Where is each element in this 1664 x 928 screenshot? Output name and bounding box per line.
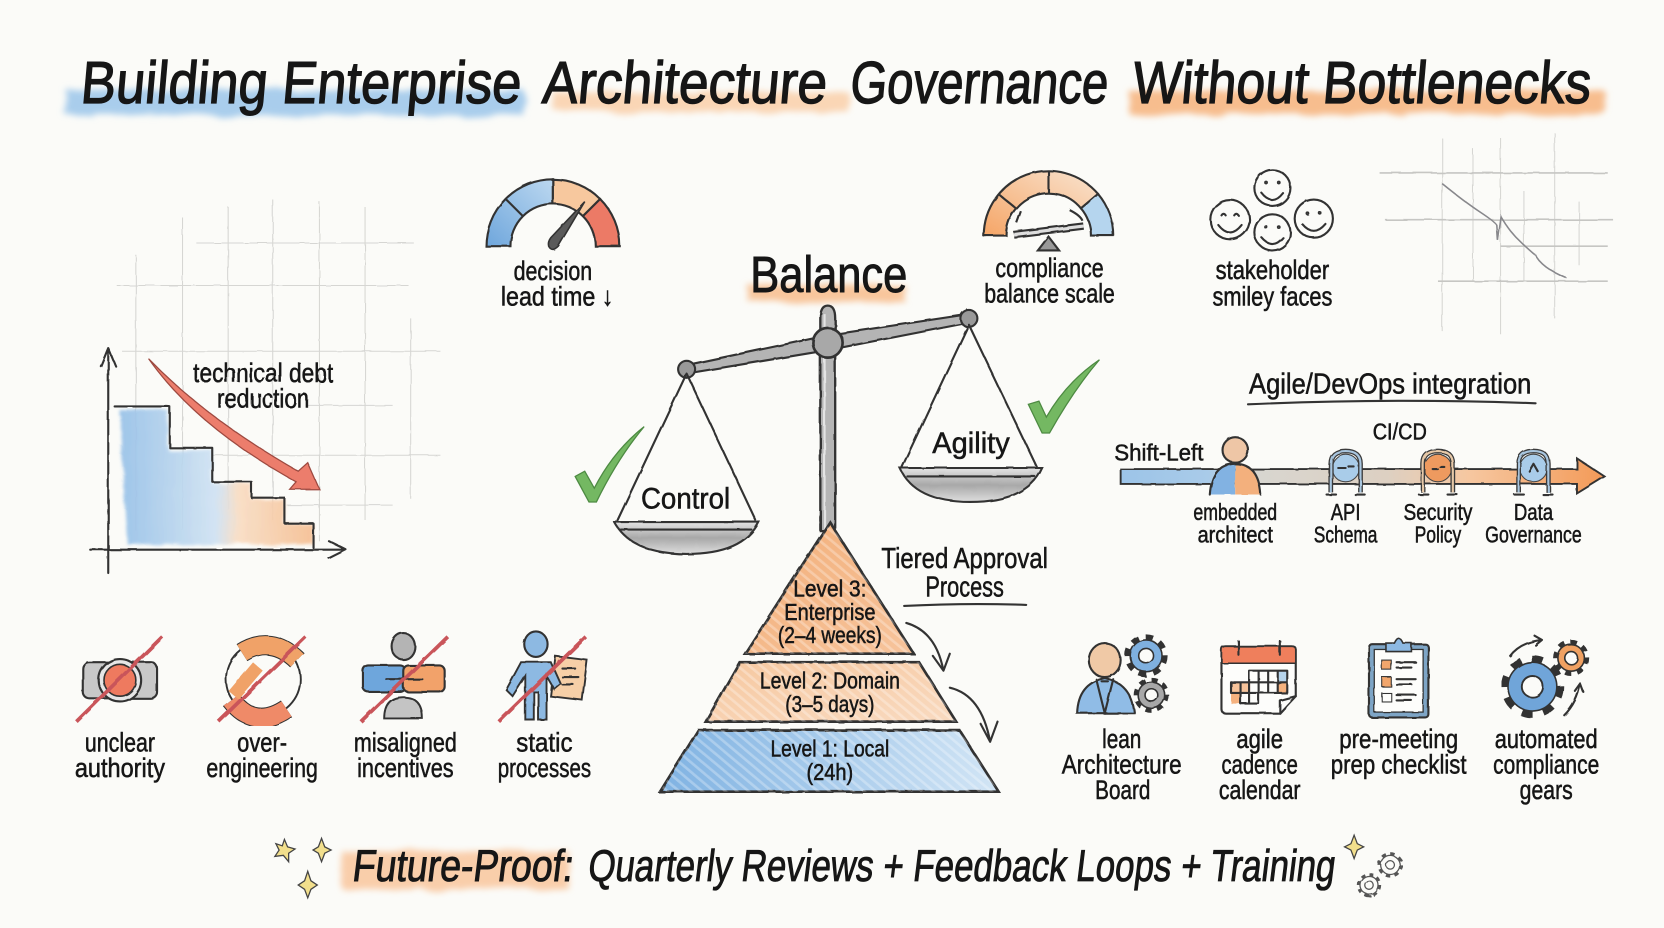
title <box>66 49 1605 116</box>
pyramid: tiered approval <box>660 522 1048 792</box>
anti-pattern labels: misaligned <box>354 727 457 757</box>
level 2 text: Level 2: Domain <box>760 668 900 694</box>
footer text <box>350 842 1339 891</box>
practice labels: calendar <box>1219 775 1301 805</box>
practice labels: pre-meeting <box>1339 724 1458 754</box>
pipeline stage labels: Security <box>1403 499 1473 525</box>
pipeline stage labels: Data <box>1514 499 1553 525</box>
left pan label: Control <box>641 482 730 515</box>
chart label: reduction <box>217 384 309 414</box>
compliance dial <box>984 171 1113 250</box>
panel: governance practices row <box>1062 636 1599 805</box>
icon: unclear authority <box>76 637 162 722</box>
title text: Architecture <box>540 49 830 116</box>
smiley label: smiley faces <box>1212 282 1332 312</box>
panel: anti-patterns row <box>75 631 591 783</box>
pipeline stage labels: embedded <box>1193 499 1277 525</box>
pipeline heading: Agile/DevOps integration <box>1249 369 1531 401</box>
chart: technical debt staircase <box>90 348 346 573</box>
level 3 text: Enterprise <box>784 599 876 625</box>
balance heading <box>748 246 907 303</box>
level 1 text: Level 1: Local <box>770 736 889 762</box>
practice labels: cadence <box>1221 750 1298 780</box>
gauge dial <box>486 179 620 249</box>
icon: misaligned incentives <box>361 633 448 722</box>
shift-left label: Shift-Left <box>1114 440 1204 466</box>
axes <box>90 348 346 573</box>
pipeline stage labels: Policy <box>1415 521 1462 547</box>
staircase fill <box>119 410 313 544</box>
icon: pre-meeting checklist <box>1369 638 1428 717</box>
title highlight strokes <box>66 90 1605 116</box>
tier arrow upper <box>906 623 950 671</box>
check mark right <box>1028 360 1099 433</box>
staircase outline <box>115 406 313 548</box>
central balance scale <box>575 306 1099 554</box>
tiered approval heading <box>881 543 1048 606</box>
practice labels: agile <box>1236 724 1283 754</box>
Data Governance gate <box>1514 451 1553 495</box>
pipeline arrow <box>1121 458 1605 493</box>
title text: Governance <box>848 49 1112 116</box>
tiered approval heading: Process <box>925 571 1004 603</box>
chart label <box>193 358 334 414</box>
compliance label: balance scale <box>984 278 1115 308</box>
level 1 tier <box>660 730 999 792</box>
level 1 text: (24h) <box>807 759 853 785</box>
scale frame <box>678 306 977 531</box>
anti-pattern labels: unclear <box>85 727 155 757</box>
footer highlight <box>342 851 569 889</box>
practice labels: compliance <box>1493 750 1599 780</box>
practice labels: prep checklist <box>1331 750 1467 780</box>
balance highlight <box>748 285 905 301</box>
smiley label: stakeholder <box>1216 255 1329 285</box>
right pan: agility <box>900 325 1042 502</box>
gauge label <box>501 256 613 312</box>
ci/cd label: CI/CD <box>1373 418 1427 444</box>
faint trend sketch top right <box>1380 133 1613 334</box>
check mark left <box>575 427 644 502</box>
level 2 text <box>760 668 900 717</box>
pipeline stage labels <box>1193 499 1582 547</box>
chart label: technical debt <box>193 358 334 388</box>
smileys <box>1210 170 1333 250</box>
anti-pattern labels: over- <box>237 727 287 757</box>
practice labels <box>1062 724 1599 805</box>
icon: automated compliance gears <box>1506 636 1586 715</box>
level 3 text <box>778 575 882 648</box>
anti-pattern labels: processes <box>498 753 591 783</box>
level 2 text: (3–5 days) <box>785 691 874 717</box>
title text: Building Enterprise <box>78 49 525 116</box>
faint background grid left <box>117 200 440 541</box>
pipeline stage labels: Schema <box>1314 521 1377 547</box>
gauge label: lead time ↓ <box>501 282 613 312</box>
anti-pattern labels: authority <box>75 753 166 783</box>
small gears <box>1359 854 1401 895</box>
footer text: Quarterly Reviews + Feedback Loops + Training <box>586 842 1339 891</box>
icon: static processes <box>499 631 587 722</box>
footer text: Future-Proof: <box>350 842 577 891</box>
level 3 text: (2–4 weeks) <box>778 622 882 648</box>
future-proof footer <box>275 835 1401 898</box>
balance text: Balance <box>750 246 907 303</box>
practice labels: Architecture <box>1062 750 1182 780</box>
level 2 tier <box>706 662 956 722</box>
icon: over-engineering <box>219 637 306 722</box>
pipeline stage labels: Governance <box>1485 521 1582 547</box>
embedded architect figure <box>1210 437 1261 495</box>
Security Policy gate <box>1419 451 1457 495</box>
tier arrow lower <box>950 688 998 742</box>
gauge: decision lead time <box>486 179 620 312</box>
left pan: control <box>614 374 759 554</box>
compliance label: compliance <box>995 253 1104 283</box>
Agile/DevOps integration pipeline <box>1114 369 1605 547</box>
right pan label: Agility <box>932 427 1010 460</box>
API Schema gate <box>1327 451 1365 495</box>
smiley label <box>1212 255 1332 312</box>
anti-pattern labels <box>75 727 591 783</box>
practice labels: lean <box>1102 724 1141 754</box>
practice labels: gears <box>1520 775 1573 805</box>
compliance label <box>984 253 1115 308</box>
tiered approval heading: Tiered Approval <box>881 543 1048 575</box>
practice labels: automated <box>1495 724 1598 754</box>
anti-pattern labels: incentives <box>357 753 454 783</box>
anti-pattern labels: static <box>516 727 573 757</box>
red reduction arrow <box>149 359 319 489</box>
icon: agile cadence calendar <box>1221 641 1296 713</box>
sparkle stars <box>275 835 1364 898</box>
gauge: compliance balance scale <box>984 171 1115 308</box>
level 3 tier <box>745 522 914 654</box>
level 3 text: Level 3: <box>793 575 866 601</box>
pipeline stage labels: API <box>1331 499 1360 525</box>
title text: Without Bottlenecks <box>1130 49 1594 116</box>
title text <box>78 49 1594 116</box>
anti-pattern labels: engineering <box>206 753 318 783</box>
gauge label: decision <box>514 256 592 286</box>
level 1 text <box>770 736 889 785</box>
icon: lean architecture board <box>1077 638 1166 713</box>
stakeholder smiley faces <box>1210 170 1333 312</box>
practice labels: Board <box>1095 775 1150 805</box>
pipeline stage labels: architect <box>1198 521 1273 547</box>
